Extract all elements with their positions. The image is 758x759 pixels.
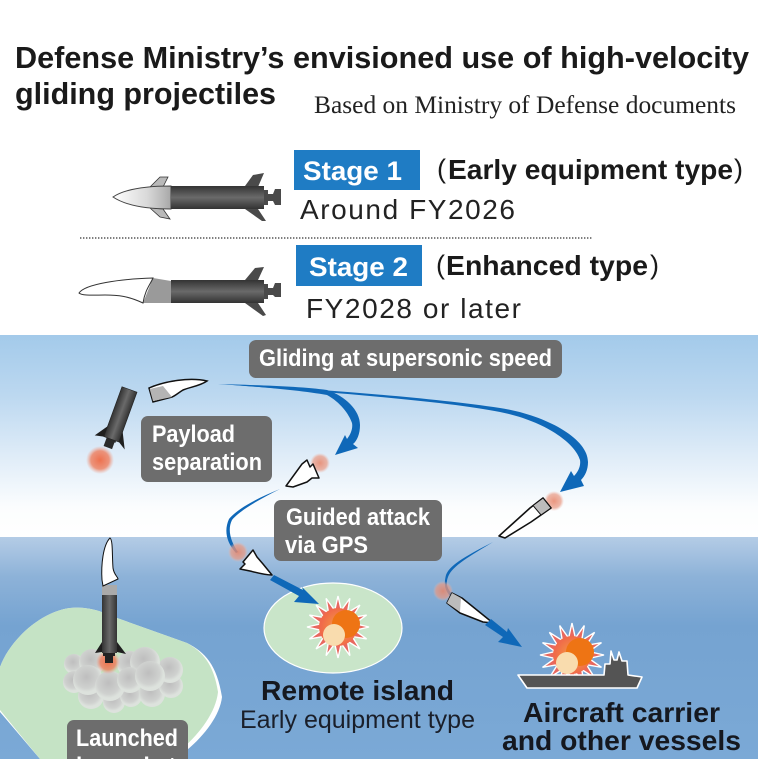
stage 2 badge	[296, 245, 422, 286]
stage 1 date: Around FY2026	[300, 194, 515, 225]
gliding arrow to vessels	[218, 384, 588, 492]
label: guided attack via GPS: via GPS	[285, 532, 368, 559]
launch island	[0, 608, 222, 759]
target label: aircraft carrier and other vessels: Aircraft carrier	[523, 697, 720, 728]
launching rocket	[95, 538, 126, 663]
separated booster	[86, 384, 145, 474]
label: payload separation	[141, 416, 272, 482]
source note: Based on Ministry of Defense documents	[314, 92, 736, 119]
title	[15, 40, 750, 111]
guided flame left	[228, 542, 248, 562]
sky background	[0, 335, 758, 537]
stage 2 type: Enhanced type	[446, 250, 648, 281]
launch flame	[96, 650, 120, 674]
stage 1 missile	[113, 173, 281, 221]
gliding arrow to island	[218, 384, 360, 455]
label: launched by rocket	[67, 720, 188, 759]
target label: remote island: Early equipment type	[240, 706, 475, 734]
title: Defense Ministry’s envisioned use of high-velocity	[15, 40, 750, 75]
stage 2 type right bracket: )	[650, 250, 659, 280]
label: payload separation: separation	[152, 449, 262, 476]
strike arrow: vessels	[485, 619, 522, 647]
guided path right	[445, 542, 493, 597]
aircraft carrier silhouette	[518, 651, 642, 688]
strike arrow: island	[270, 575, 319, 604]
label: payload separation: Payload	[152, 421, 235, 448]
target label: remote island	[240, 675, 475, 734]
explosion: vessels	[540, 623, 604, 687]
label: guided attack via GPS: Guided attack	[286, 504, 431, 531]
stage 2 type left bracket: (	[436, 250, 445, 280]
target label: aircraft carrier and other vessels: and other vessels	[502, 725, 741, 756]
stage 1 type: Early equipment type	[448, 154, 733, 185]
stage 1 type left bracket: (	[437, 154, 446, 184]
label: guided attack via GPS	[274, 500, 442, 561]
glider after dive	[286, 453, 330, 487]
target label: aircraft carrier and other vessels	[502, 697, 741, 756]
label: gliding at supersonic speed	[249, 340, 562, 378]
launch smoke	[63, 647, 183, 713]
label: gliding at supersonic speed: Gliding at supersonic speed	[259, 345, 552, 372]
explosion: remote island	[307, 596, 369, 658]
guided flame right	[433, 581, 453, 601]
stage 1 badge	[294, 150, 420, 190]
detached glider	[149, 379, 207, 402]
missile towards vessels	[499, 491, 564, 538]
sea background	[0, 537, 758, 759]
stage 2 missile	[79, 267, 281, 316]
target label: remote island: Remote island	[261, 675, 454, 706]
terminal glider left	[240, 550, 272, 575]
label: launched by rocket: Launched	[76, 725, 178, 752]
remote island	[264, 583, 402, 673]
stage 1 type right bracket: )	[734, 154, 743, 184]
terminal glider right	[447, 593, 493, 623]
stage 1 badge: Stage 1	[303, 156, 402, 186]
guided path left	[226, 489, 280, 553]
stage 2 badge: Stage 2	[309, 252, 408, 282]
stage 2 date: FY2028 or later	[306, 293, 521, 324]
title: gliding projectiles	[15, 76, 276, 111]
